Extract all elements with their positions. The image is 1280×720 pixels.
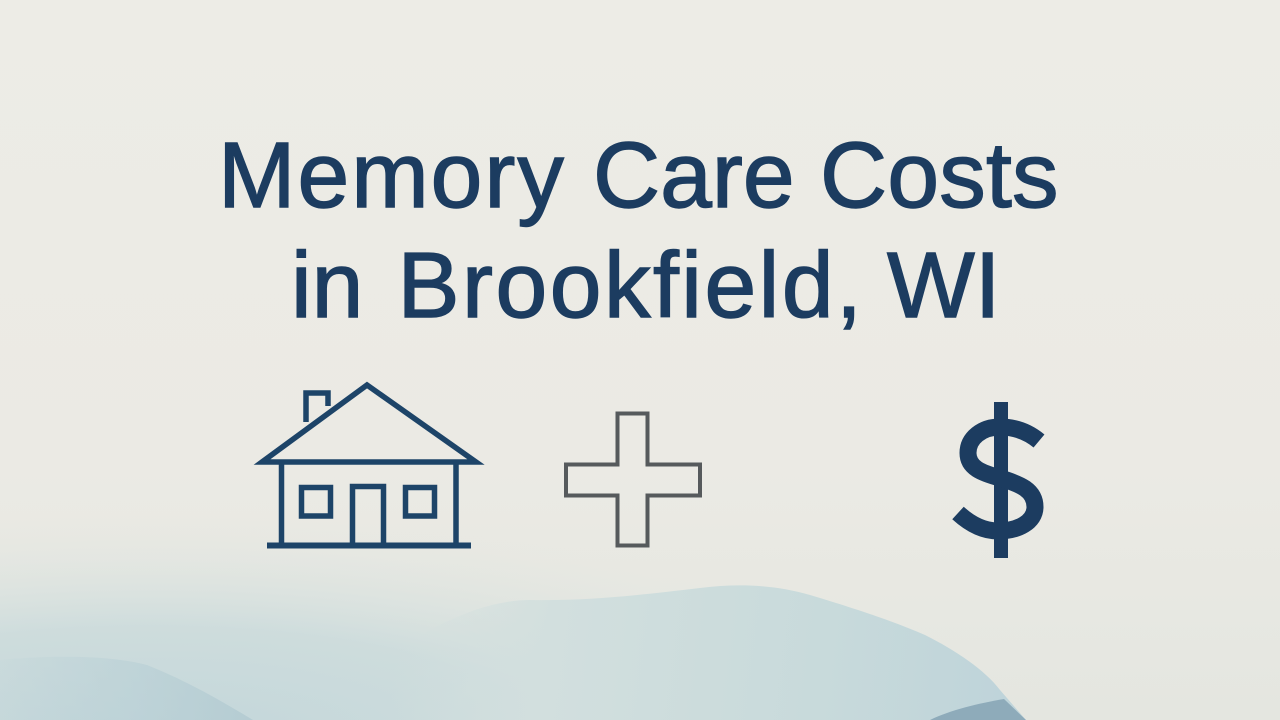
right dark hill (930, 699, 1026, 720)
left hill (0, 657, 253, 720)
house right window (406, 488, 434, 516)
background mist band (0, 515, 950, 720)
house door (352, 486, 384, 545)
house chimney (306, 393, 328, 422)
icon: house (262, 385, 476, 546)
title line 2: in (291, 233, 363, 337)
title line 1: Costs (820, 123, 1059, 227)
dollar S curve (958, 427, 1039, 531)
title line 1: Care (593, 123, 795, 227)
title line 1: Memory (218, 123, 566, 227)
dollar vertical bar (994, 402, 1008, 558)
title line 2: Brookfield, (398, 233, 864, 337)
title line 2: WI (887, 233, 1001, 337)
house ground line (267, 542, 471, 548)
title (218, 123, 1059, 337)
icon: plus cross (566, 414, 700, 546)
house roof (262, 385, 476, 462)
icon: dollar sign (958, 402, 1039, 558)
house left window (302, 488, 330, 516)
house walls (282, 462, 456, 545)
central hill (300, 585, 1026, 720)
